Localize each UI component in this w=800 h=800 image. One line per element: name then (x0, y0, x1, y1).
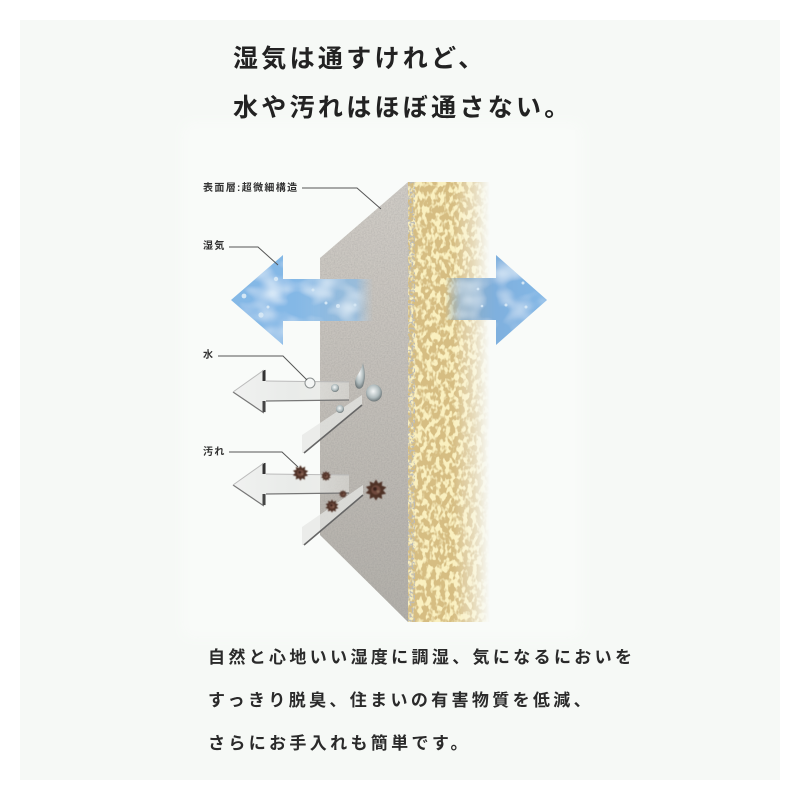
label: surface layer: 表面層:超微細構造 (203, 183, 298, 194)
water droplets (305, 363, 382, 413)
body text line 3: さらにお手入れも簡単です。 (208, 734, 471, 753)
arrow: humidity left (231, 255, 373, 345)
title: 湿気は通すけれど、 (233, 45, 486, 73)
foam core layer (408, 182, 490, 622)
leader line: water (218, 356, 307, 380)
leader line: dirt (229, 452, 298, 467)
title line 2: 水や汚れはほぼ通さない。 (233, 94, 573, 122)
body text line 2: すっきり脱臭、住まいの有害物質を低減、 (208, 691, 594, 710)
arrow: humidity right (445, 255, 547, 345)
label: humidity: 湿気 (203, 241, 226, 252)
label: dirt: 汚れ (203, 447, 226, 458)
arrow: water deflected (302, 395, 362, 453)
leader line: surface layer (302, 188, 381, 209)
arrow: water blocked, reflected left (233, 369, 349, 413)
label: water: 水 (203, 350, 214, 361)
arrow: dirt blocked, reflected left (233, 462, 349, 506)
dirt particles (293, 465, 386, 513)
diagram: wall cross-section (218, 182, 547, 622)
leader line: humidity (229, 247, 278, 265)
surface panel (320, 182, 408, 622)
arrow: dirt deflected (302, 485, 363, 545)
body text line 1: 自然と心地いい湿度に調湿、気になるにおいを (208, 648, 635, 667)
